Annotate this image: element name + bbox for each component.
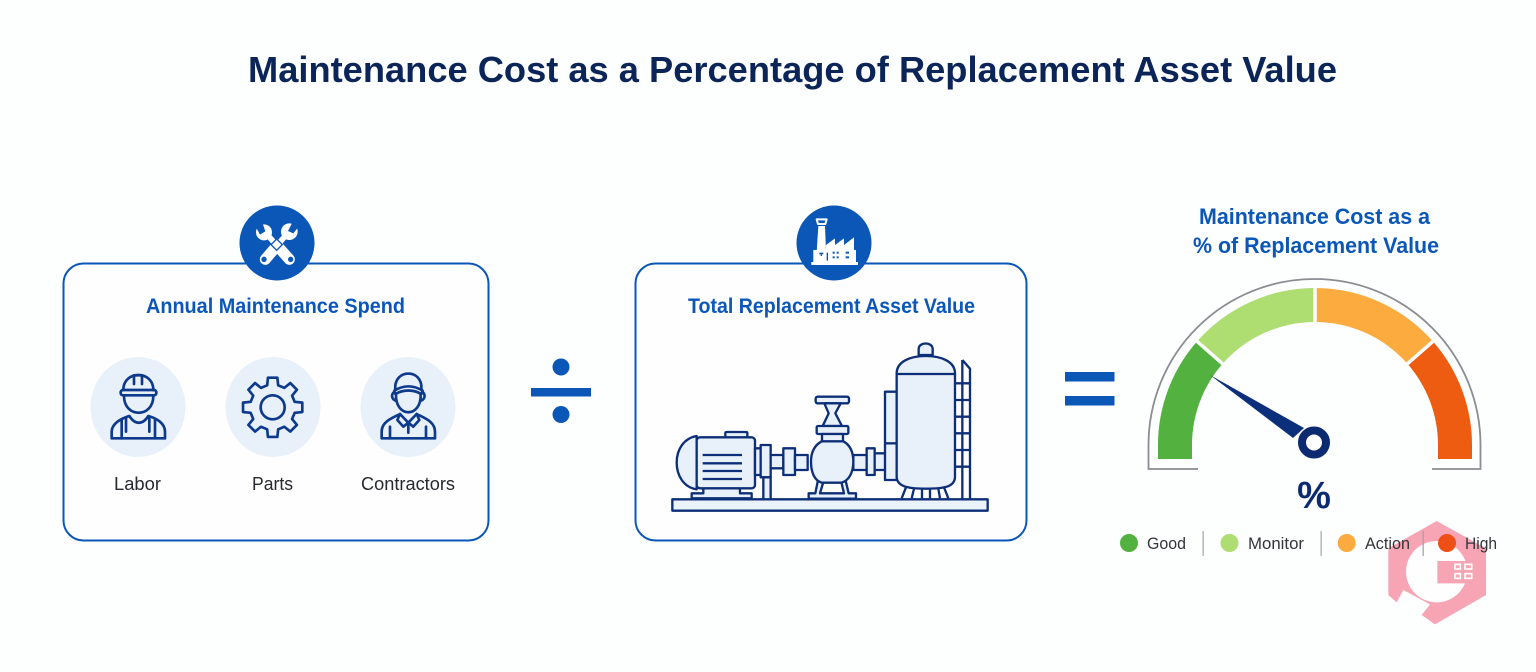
item: labor [90,357,186,494]
gauge heading: % of Replacement Value [1193,233,1439,258]
needle [1210,375,1326,454]
legend: good [1120,534,1186,553]
gauge heading [1193,204,1439,258]
tank and ladder [885,343,970,499]
panel frame [636,264,1026,540]
gauge segment: monitor [1197,288,1315,364]
legend: high: High [1465,534,1497,553]
panel: annual maintenance spend [64,206,488,540]
legend: high [1438,534,1497,553]
legend: action [1338,534,1410,553]
panel frame [64,264,488,540]
equals symbol [1065,372,1114,406]
icon: crossed wrenches [240,206,314,280]
item: parts [226,357,320,494]
legend: monitor [1220,534,1304,553]
title: Maintenance Cost as a Percentage of Replacement Asset Value [248,49,1337,90]
legend: action: Action [1365,534,1410,553]
legend: good: Good [1147,534,1186,553]
gauge segment: action [1315,288,1433,364]
legend [1120,531,1497,556]
panel heading: Annual Maintenance Spend [146,295,405,318]
label: contractors: Contractors [361,474,455,494]
percent symbol: % [1297,475,1331,517]
icon: factory [796,206,872,280]
legend: monitor: Monitor [1248,534,1304,553]
illustration: pump, valve and tank [672,343,988,511]
divide symbol [531,358,591,423]
panel: total replacement asset value [636,206,1026,540]
coupling and pipe [755,445,885,499]
gauge panel [1148,204,1480,517]
motor [677,432,755,498]
item: contractors [360,357,456,494]
valve and pump casing [809,397,856,499]
label: parts: Parts [252,474,293,494]
gauge segment: high [1407,341,1472,459]
gauge heading: Maintenance Cost as a [1199,204,1431,229]
gauge outer rim [1148,279,1480,469]
panel heading: Total Replacement Asset Value [688,295,975,318]
gauge segment: good [1158,341,1223,459]
label: labor: Labor [114,474,161,494]
watermark [1388,521,1486,624]
